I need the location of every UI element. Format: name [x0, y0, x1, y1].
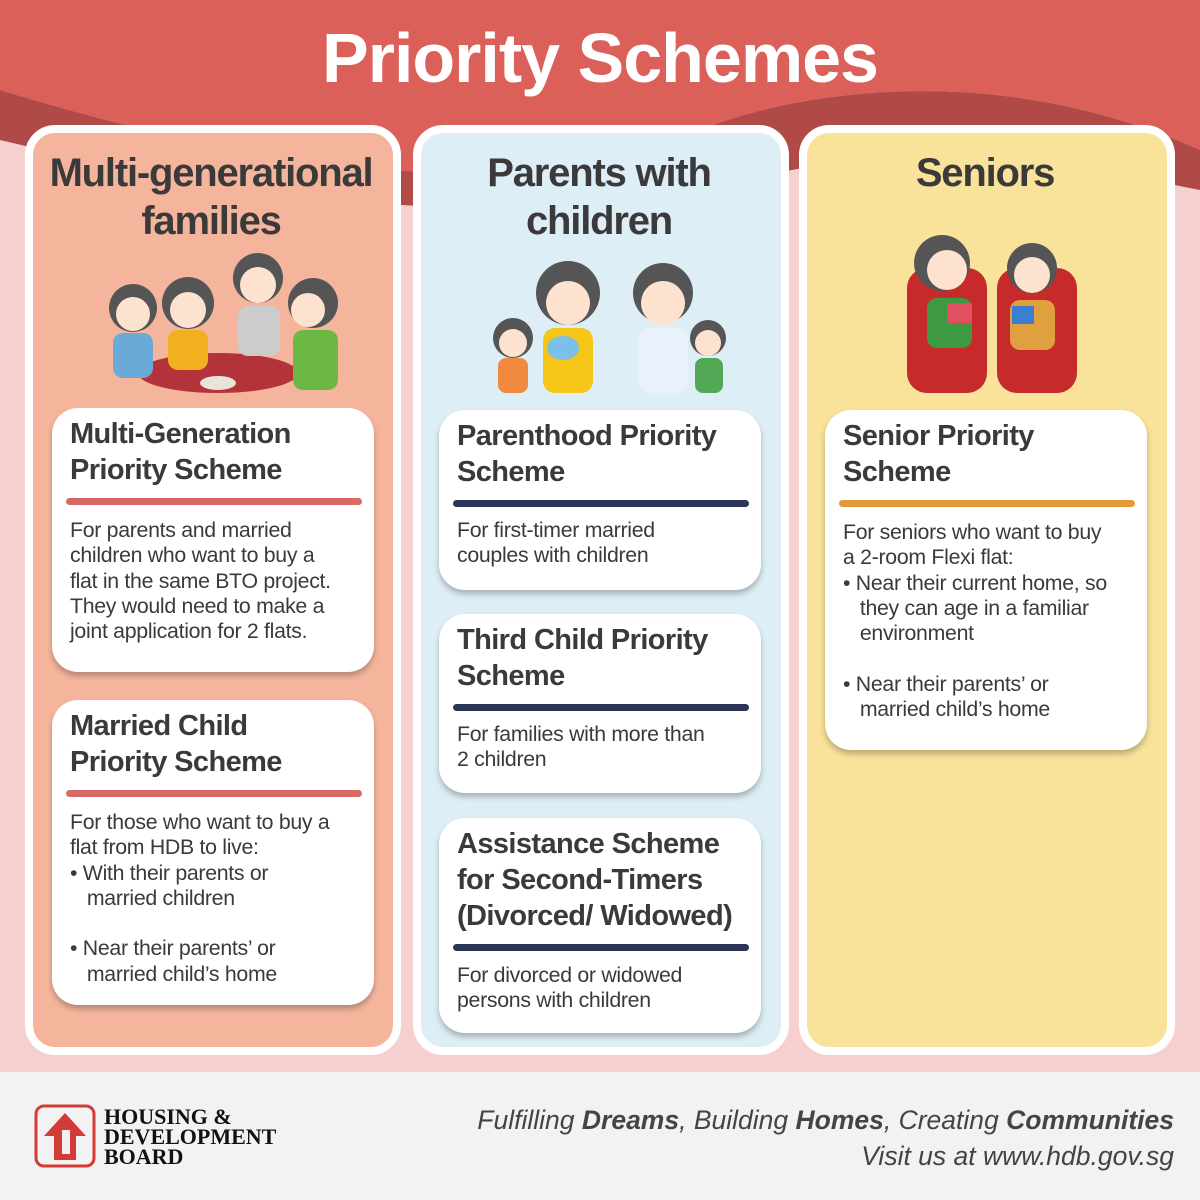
- panel: seniors: [799, 125, 1175, 1055]
- card: Married Child Priority Scheme: married children: [87, 886, 235, 910]
- icon: seniors in armchairs: [907, 235, 1077, 393]
- heading: Parents with: [487, 151, 711, 195]
- card: Married Child Priority Scheme: Married Child: [70, 710, 248, 742]
- card: Married Child Priority Scheme: flat from HDB to live:: [70, 835, 259, 859]
- card: Multi-Generation Priority Scheme: They would need to make a: [70, 594, 324, 618]
- logo: HDB: [34, 1104, 276, 1169]
- card: Senior Priority Scheme: married child’s home: [860, 697, 1050, 721]
- card: Parenthood Priority Scheme: For first-timer married: [457, 518, 655, 542]
- heading: Multi-generational: [50, 151, 372, 195]
- card: Assistance Scheme for Second-Timers: [439, 818, 761, 1033]
- card: Senior Priority Scheme: For seniors who want to buy: [843, 520, 1101, 544]
- card: Parenthood Priority Scheme: couples with children: [457, 543, 648, 567]
- logo: HDB: BOARD: [104, 1144, 183, 1169]
- card: Married Child Priority Scheme: • With their parents or: [70, 861, 268, 885]
- card: Married Child Priority Scheme: married child’s home: [87, 962, 277, 986]
- tagline: Visit us at www.hdb.gov.sg: [861, 1141, 1174, 1171]
- card: Senior Priority Scheme: • Near their current home, so: [843, 571, 1107, 595]
- heading: [50, 151, 372, 243]
- card: Multi-Generation Priority Scheme: children who want to buy a: [70, 543, 314, 567]
- card: Senior Priority Scheme: Senior Priority: [843, 420, 1034, 452]
- card: Parenthood Priority Scheme: Parenthood Priority: [457, 420, 716, 452]
- card: Multi-Generation Priority Scheme: joint application for 2 flats.: [70, 619, 307, 643]
- tagline: Fulfilling Dreams, Building Homes, Creating Communities: [477, 1105, 1174, 1135]
- card: Senior Priority Scheme: environment: [860, 621, 974, 645]
- panel: parents with children: [413, 125, 789, 1055]
- card: Parenthood Priority Scheme: Scheme: [457, 456, 565, 488]
- card: Assistance Scheme for Second-Timers: (Divorced/ Widowed): [457, 900, 732, 932]
- card: Assistance Scheme for Second-Timers: For divorced or widowed: [457, 963, 682, 987]
- card: Married Child Priority Scheme: [52, 700, 374, 1005]
- card: Assistance Scheme for Second-Timers: for Second-Timers: [457, 864, 702, 896]
- title: Priority Schemes: [322, 19, 878, 97]
- footer: [0, 1072, 1200, 1200]
- heading: Seniors: [916, 151, 1054, 195]
- card: Senior Priority Scheme: Scheme: [843, 456, 951, 488]
- card: Third Child Priority Scheme: [439, 614, 761, 793]
- card: Assistance Scheme for Second-Timers: persons with children: [457, 988, 651, 1012]
- logo: HDB: HOUSING &: [104, 1104, 232, 1129]
- card: Multi-Generation Priority Scheme: For parents and married: [70, 518, 292, 542]
- card: Third Child Priority Scheme: Scheme: [457, 660, 565, 692]
- card: Multi-Generation Priority Scheme: Multi-Generation: [70, 418, 291, 450]
- card: Senior Priority Scheme: [825, 410, 1147, 750]
- card: Married Child Priority Scheme: Priority Scheme: [70, 746, 282, 778]
- card: Multi-Generation Priority Scheme: Priority Scheme: [70, 454, 282, 486]
- heading: children: [526, 199, 672, 243]
- card: Assistance Scheme for Second-Timers: Assistance Scheme: [457, 828, 719, 860]
- heading: [487, 151, 711, 243]
- icon: parents with kids: [493, 261, 726, 393]
- card: Married Child Priority Scheme: • Near their parents’ or: [70, 936, 275, 960]
- icon: family at dinner table: [109, 253, 338, 393]
- card: Multi-Generation Priority Scheme: flat in the same BTO project.: [70, 569, 331, 593]
- tagline: [477, 1105, 1174, 1171]
- panel: multi-generational families: [25, 125, 401, 1055]
- card: Third Child Priority Scheme: For families with more than: [457, 722, 705, 746]
- card: Third Child Priority Scheme: Third Child Priority: [457, 624, 708, 656]
- card: Senior Priority Scheme: they can age in a familiar: [860, 596, 1089, 620]
- card: Senior Priority Scheme: • Near their parents’ or: [843, 672, 1048, 696]
- card: Third Child Priority Scheme: 2 children: [457, 747, 546, 771]
- card: Multi-Generation Priority Scheme: [52, 408, 374, 672]
- card: Senior Priority Scheme: a 2-room Flexi flat:: [843, 545, 1013, 569]
- card: Parenthood Priority Scheme: [439, 410, 761, 590]
- header background: [0, 0, 1200, 206]
- logo: HDB: DEVELOPMENT: [104, 1124, 276, 1149]
- card: Married Child Priority Scheme: For those who want to buy a: [70, 810, 329, 834]
- heading: families: [141, 199, 281, 243]
